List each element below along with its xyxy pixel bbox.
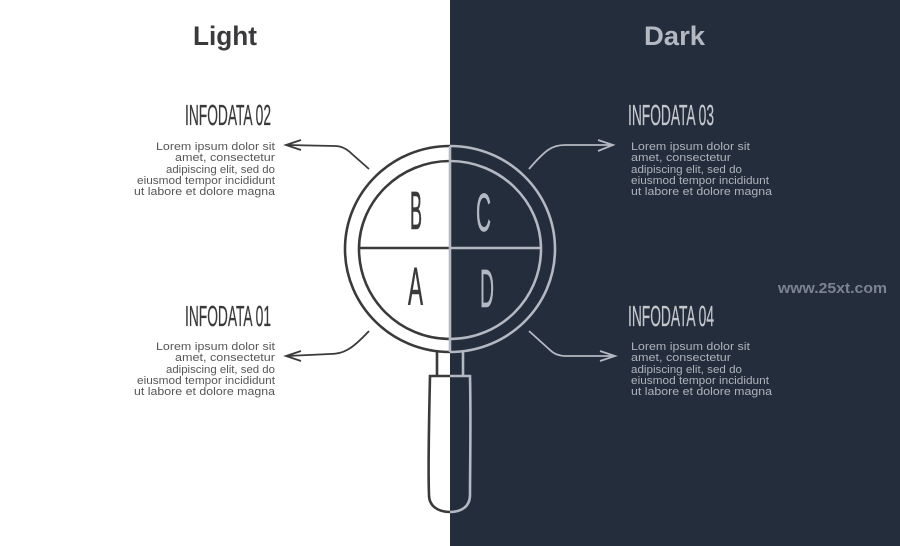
text block: INFODATA 02 description: eiusmod tempor incididunt <box>137 175 275 187</box>
text block: INFODATA 01 description: eiusmod tempor incididunt <box>137 375 275 387</box>
text block: INFODATA 04 description: amet, consectetur <box>631 352 731 364</box>
heading: Light: Light <box>193 21 257 51</box>
text block: INFODATA 04 description <box>631 341 773 398</box>
block: INFODATA 03 <box>628 100 773 198</box>
text block: INFODATA 01 description: amet, consectetur <box>175 352 275 364</box>
text block: INFODATA 03 description: eiusmod tempor incididunt <box>631 175 769 187</box>
text block: INFODATA 03 description: amet, consectetur <box>631 152 731 164</box>
icon: magnifier dark half <box>450 146 555 512</box>
block: INFODATA 02: INFODATA 02 <box>185 100 271 132</box>
arrow: to INFODATA 03 <box>529 140 613 169</box>
text block: INFODATA 02 description: amet, consectetur <box>175 152 275 164</box>
watermark: www.25xt.com <box>777 281 887 297</box>
icon: magnifier light half <box>345 146 450 512</box>
text block: INFODATA 04 description: adipiscing elit, sed do <box>631 364 742 376</box>
text block: INFODATA 03 description <box>631 141 773 198</box>
text block: INFODATA 03 description: ut labore et dolore magna <box>631 186 773 198</box>
arrow: to INFODATA 04 <box>529 331 615 361</box>
block: INFODATA 04: INFODATA 04 <box>628 301 714 333</box>
text block: INFODATA 01 description: Lorem ipsum dolor sit <box>156 341 275 353</box>
text block: INFODATA 04 description: ut labore et dolore magna <box>631 386 773 398</box>
text block: INFODATA 04 description: Lorem ipsum dolor sit <box>631 341 750 353</box>
arrow: to INFODATA 01 <box>286 331 369 361</box>
text: D <box>480 259 494 319</box>
text block: INFODATA 01 description <box>134 341 276 398</box>
block: INFODATA 01: INFODATA 01 <box>185 301 271 333</box>
text block: INFODATA 02 description: Lorem ipsum dolor sit <box>156 141 275 153</box>
block: INFODATA 04 <box>628 301 773 398</box>
text block: INFODATA 04 description: eiusmod tempor incididunt <box>631 375 769 387</box>
block: INFODATA 03: INFODATA 03 <box>628 100 714 132</box>
text block: INFODATA 03 description: Lorem ipsum dolor sit <box>631 141 750 153</box>
text block: INFODATA 01 description: adipiscing elit, sed do <box>166 364 275 376</box>
text block: INFODATA 03 description: adipiscing elit, sed do <box>631 164 742 176</box>
arrow: to INFODATA 02 <box>286 140 369 169</box>
block: INFODATA 02 <box>134 100 276 198</box>
block: INFODATA 01 <box>134 301 276 398</box>
panel: dark half background <box>450 0 900 546</box>
text: A <box>408 257 423 317</box>
text: B <box>410 181 422 241</box>
text block: INFODATA 01 description: ut labore et dolore magna <box>134 386 276 398</box>
text block: INFODATA 02 description: adipiscing elit, sed do <box>166 164 275 176</box>
text: C <box>476 183 491 243</box>
text block: INFODATA 02 description <box>134 141 276 198</box>
text block: INFODATA 02 description: ut labore et dolore magna <box>134 186 276 198</box>
heading: Dark: Dark <box>644 21 706 51</box>
